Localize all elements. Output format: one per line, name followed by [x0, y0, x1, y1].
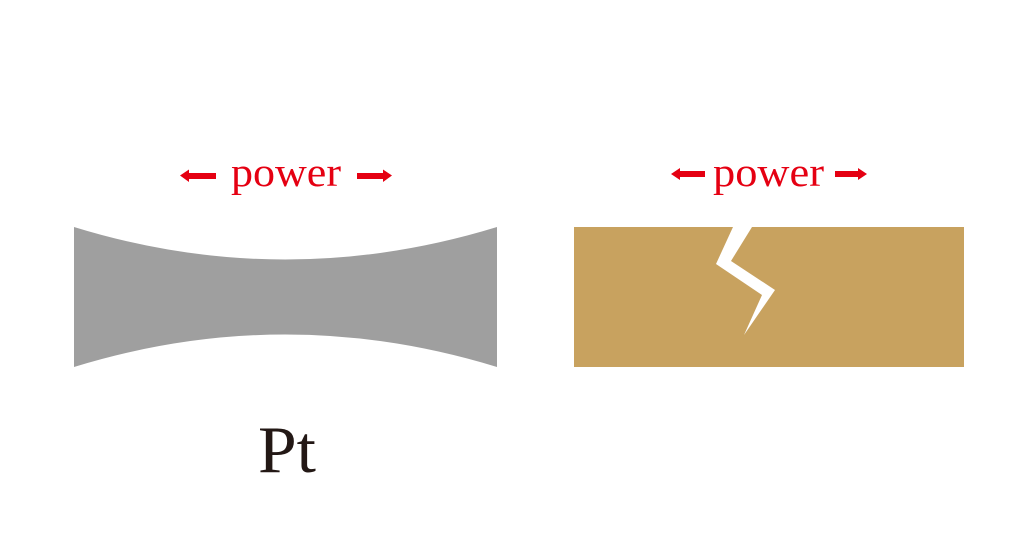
- shape: stretched grey platinum bar: [74, 227, 497, 367]
- shape: cracked gold brittle bar: [574, 227, 964, 367]
- label: power (left) with arrows: [180, 149, 392, 195]
- label: Pt: Pt: [258, 413, 316, 487]
- crack: [716, 227, 775, 335]
- text: power (right): power: [713, 149, 824, 195]
- arrow: right pointing (left): [357, 170, 392, 182]
- arrow: left pointing (right): [671, 168, 705, 180]
- text: power (left): power: [231, 149, 341, 195]
- bar body: [574, 227, 964, 367]
- label: power (right) with arrows: [671, 149, 867, 195]
- arrow: left pointing (left): [180, 170, 216, 182]
- arrow: right pointing (right): [835, 168, 867, 180]
